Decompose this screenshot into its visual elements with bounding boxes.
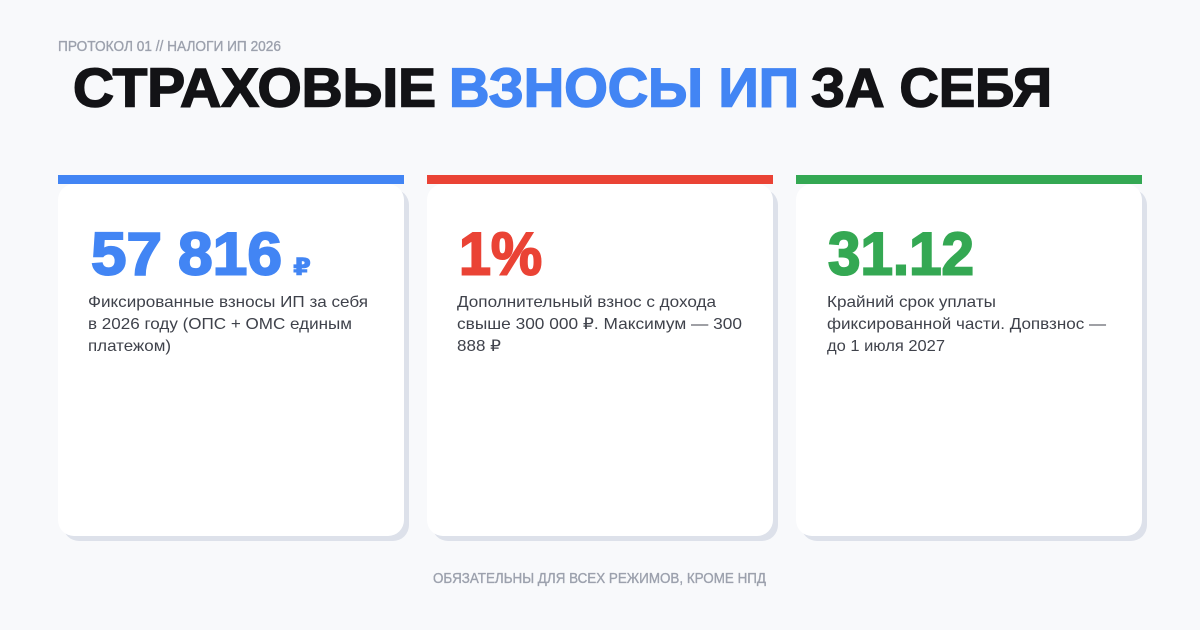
description: Фиксированные взносы ИП за себя bbox=[88, 294, 368, 311]
description: Крайний срок уплаты bbox=[827, 294, 996, 311]
stat: amount bbox=[91, 220, 311, 288]
description: фиксированной части. Допвзнос — bbox=[827, 316, 1106, 333]
stat: date: 31.12 bbox=[828, 220, 974, 288]
description: в 2026 году (ОПС + ОМС единым bbox=[88, 316, 352, 333]
stat: amount: 816 bbox=[178, 220, 282, 288]
description: свыше 300 000 ₽. Максимум — 300 bbox=[457, 316, 742, 333]
stat: amount: 57 bbox=[91, 220, 162, 288]
title bbox=[73, 56, 1052, 118]
description: Дополнительный взнос с дохода bbox=[457, 294, 716, 311]
accent bar red bbox=[427, 175, 773, 184]
description bbox=[88, 294, 368, 355]
description bbox=[827, 294, 1106, 355]
description bbox=[457, 294, 742, 355]
title: ВЗНОСЫ ИП bbox=[449, 56, 799, 118]
panel: additional contribution bbox=[427, 175, 778, 541]
description: платежом) bbox=[88, 338, 171, 355]
footer note: ОБЯЗАТЕЛЬНЫ ДЛЯ ВСЕХ РЕЖИМОВ, КРОМЕ НПД bbox=[433, 571, 766, 587]
title: СТРАХОВЫЕ bbox=[73, 56, 436, 118]
accent bar blue bbox=[58, 175, 404, 184]
panel: fixed contributions bbox=[58, 175, 409, 541]
title: ЗА СЕБЯ bbox=[811, 56, 1052, 118]
eyebrow label: ПРОТОКОЛ 01 // НАЛОГИ ИП 2026 bbox=[58, 39, 281, 55]
panel: deadline bbox=[796, 175, 1147, 541]
description: до 1 июля 2027 bbox=[827, 338, 945, 355]
accent bar green bbox=[796, 175, 1142, 184]
description: 888 ₽ bbox=[457, 338, 501, 355]
stat: percent: 1% bbox=[459, 220, 542, 288]
stat: amount: ₽ bbox=[293, 254, 311, 281]
